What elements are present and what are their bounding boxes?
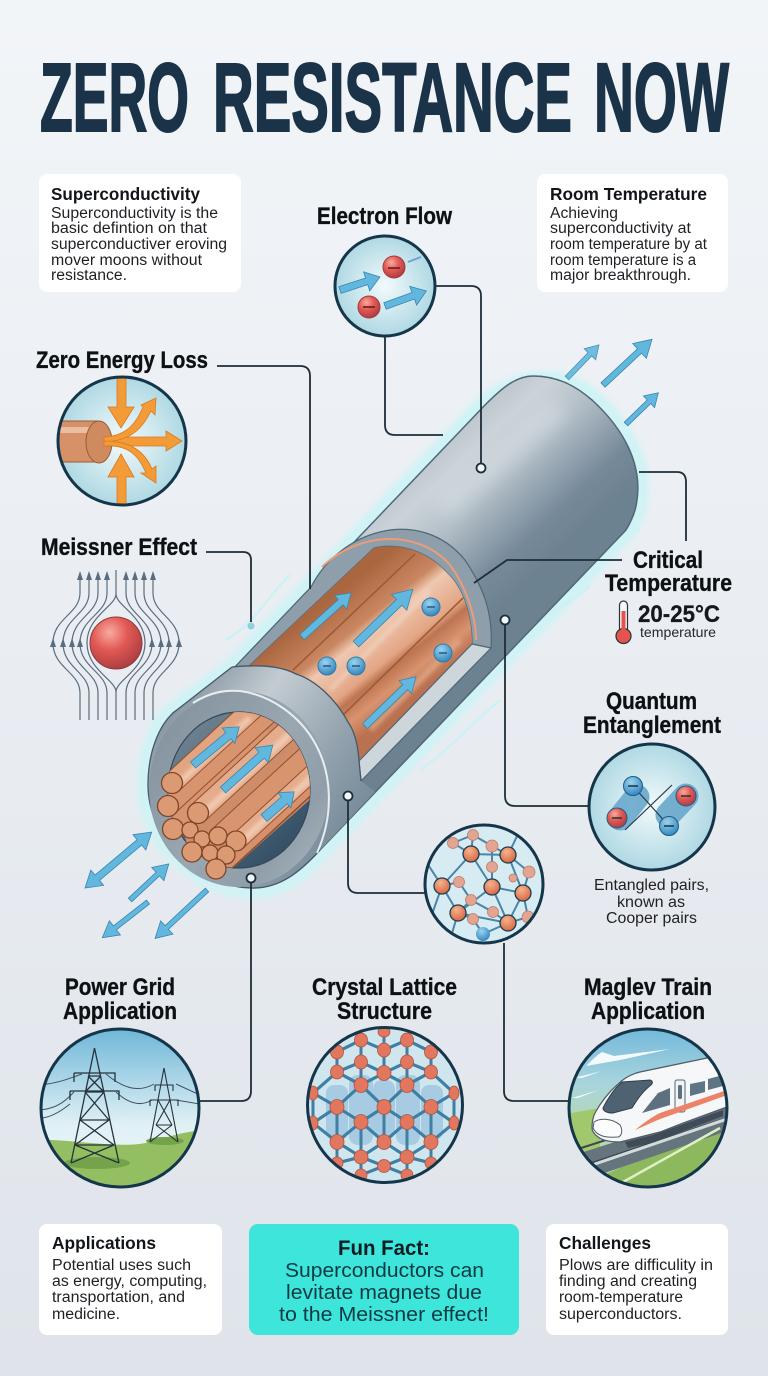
label: power grid application: Application — [63, 998, 177, 1025]
value: temperature range — [638, 601, 720, 640]
label: quantum entanglement: Entanglement — [583, 712, 721, 739]
nose panel — [593, 1119, 622, 1137]
electrons — [607, 776, 696, 836]
minus signs — [612, 786, 691, 826]
caption: entangled pairs: known as — [617, 894, 685, 911]
label: quantum entanglement: Quantum — [606, 688, 697, 715]
panel body text: superconductivity at — [550, 220, 692, 237]
end face — [149, 691, 329, 887]
inner wall strip and end wall — [234, 529, 491, 668]
panel: superconductivity — [39, 174, 241, 292]
blue crystal patches — [326, 1075, 443, 1145]
panel body text: room temperature by at — [550, 236, 708, 253]
panel heading: Room Temperature — [550, 184, 707, 204]
panel heading: Superconductivity — [51, 184, 200, 204]
panel body text: Plows are difficulity in — [559, 1257, 713, 1274]
red levitating ball — [90, 617, 142, 669]
callout body: to the Meissner effect! — [279, 1303, 489, 1326]
hills — [49, 1131, 194, 1186]
panel body text: mover moons without — [51, 252, 203, 269]
caption: entangled pairs: Cooper pairs — [606, 910, 697, 927]
face highlight — [193, 691, 329, 853]
callout body — [279, 1259, 489, 1326]
title: ZERO — [40, 43, 189, 152]
illustration: power grid — [40, 1028, 200, 1188]
front collar — [148, 666, 375, 888]
panel body text: as energy, computing, — [52, 1273, 207, 1290]
superconducting cable — [148, 376, 638, 888]
label: critical temperature: Temperature — [605, 570, 732, 597]
label: maglev train application: Application — [591, 998, 705, 1025]
callout heading: Fun Fact: — [338, 1236, 430, 1260]
callout: fun fact — [249, 1224, 519, 1335]
copper core in cutaway — [250, 546, 472, 760]
label: power grid application: Power Grid — [65, 974, 175, 1001]
panel: challenges — [546, 1224, 728, 1335]
panel body text: Achieving — [550, 205, 618, 222]
blue node — [476, 927, 490, 941]
tube highlight — [440, 405, 560, 510]
lower cut edge — [359, 644, 491, 781]
panel body text — [52, 1257, 207, 1323]
panel body text: room temperature is a — [550, 252, 696, 269]
flow arrows — [337, 268, 430, 315]
panel: applications — [39, 1224, 222, 1335]
current arrows in strands — [187, 581, 422, 826]
red electrons — [358, 256, 405, 318]
field lines — [53, 570, 179, 720]
value: temperature range: 20-25°C — [638, 601, 720, 628]
illustration: crystal lattice — [308, 1027, 462, 1182]
leader lines and anchor dots — [199, 286, 686, 1101]
panel body text — [559, 1257, 713, 1323]
panel body text: medicine. — [52, 1306, 120, 1323]
label: maglev train application — [584, 974, 712, 1025]
panel body text — [51, 205, 227, 284]
panel body text: superconductors. — [559, 1306, 682, 1323]
panel body text: superconductiver eroving — [51, 236, 227, 253]
icon: meissner field lines and ball — [50, 570, 182, 720]
wires — [40, 1074, 200, 1118]
lattice bond highlight — [316, 1041, 450, 1174]
label: quantum entanglement — [583, 688, 721, 739]
icon: thermometer — [616, 601, 631, 644]
panel body text: resistance. — [51, 267, 127, 284]
door — [675, 1080, 685, 1112]
electron minus signs — [323, 607, 447, 666]
panel heading: Applications — [52, 1233, 156, 1253]
undercarriage — [625, 1110, 723, 1148]
minus signs — [363, 268, 400, 307]
label: zero energy loss: Zero Energy Loss — [36, 347, 208, 374]
crossing links — [625, 785, 672, 830]
caption: entangled pairs — [594, 877, 709, 927]
label: electron flow: Electron Flow — [317, 203, 452, 230]
lattice bonds — [428, 836, 528, 932]
label: crystal lattice structure: Crystal Lattice — [312, 974, 457, 1001]
copper strand bundle — [168, 712, 310, 868]
panel body text: room-temperature — [559, 1289, 683, 1306]
callout body: Superconductors can — [285, 1259, 484, 1282]
windshield — [603, 1080, 652, 1113]
cloud streaks — [572, 1049, 670, 1098]
panel body text: Superconductivity is the — [51, 205, 218, 222]
illustration: maglev train — [568, 1028, 728, 1188]
caption: entangled pairs: Entangled pairs, — [594, 877, 709, 894]
hollow end — [168, 712, 310, 868]
panel body text: major breakthrough. — [550, 267, 691, 284]
orange force arrows — [104, 378, 182, 505]
electrons in cutaway — [318, 598, 452, 675]
label: critical temperature: Critical — [633, 547, 703, 574]
arrows leaving cable, upper right — [561, 332, 664, 430]
outer tube — [173, 376, 638, 888]
panel heading: Challenges — [559, 1233, 651, 1253]
label: maglev train application: Maglev Train — [584, 974, 712, 1001]
panel body text — [550, 205, 708, 284]
side windows — [642, 1088, 670, 1113]
callout body: levitate magnets due — [286, 1281, 482, 1304]
label: crystal lattice structure: Structure — [337, 998, 432, 1025]
icon: quantum entanglement — [589, 744, 715, 870]
collar outline — [148, 666, 361, 888]
icon: crystal lattice detail — [425, 825, 543, 943]
panel body text: basic defintion on that — [51, 220, 208, 237]
glowing orange arc — [322, 539, 476, 640]
panel: room temperature — [537, 174, 728, 292]
lattice atoms — [308, 1027, 459, 1181]
superconducting cable glow and wisps — [148, 382, 640, 888]
panel body text: transportation, and — [52, 1289, 185, 1306]
panel body text: finding and creating — [559, 1273, 697, 1290]
label: crystal lattice structure — [312, 974, 457, 1025]
tall pylon — [70, 1048, 119, 1163]
label: power grid application — [63, 974, 177, 1025]
arrows leaving cable, lower left — [79, 824, 213, 945]
label: meissner effect: Meissner Effect — [41, 534, 197, 561]
major lattice nodes — [434, 846, 531, 931]
train body — [591, 1058, 726, 1142]
entangled pills — [620, 796, 686, 818]
panel body text: Potential uses such — [52, 1257, 191, 1274]
minor lattice nodes — [448, 830, 535, 924]
green ground behind track — [570, 1108, 600, 1152]
red stripe — [635, 1091, 724, 1130]
field arrowheads — [50, 571, 182, 647]
lattice bonds — [313, 1032, 454, 1175]
icon: zero energy loss — [50, 377, 186, 505]
short pylon — [150, 1068, 178, 1142]
value: temperature range: temperature — [640, 624, 716, 640]
icon: electron flow — [335, 236, 435, 336]
rod end cap — [86, 421, 112, 463]
copper rod — [60, 420, 100, 462]
track — [584, 1108, 726, 1173]
label: critical temperature — [605, 547, 732, 597]
strand end caps — [158, 772, 246, 879]
